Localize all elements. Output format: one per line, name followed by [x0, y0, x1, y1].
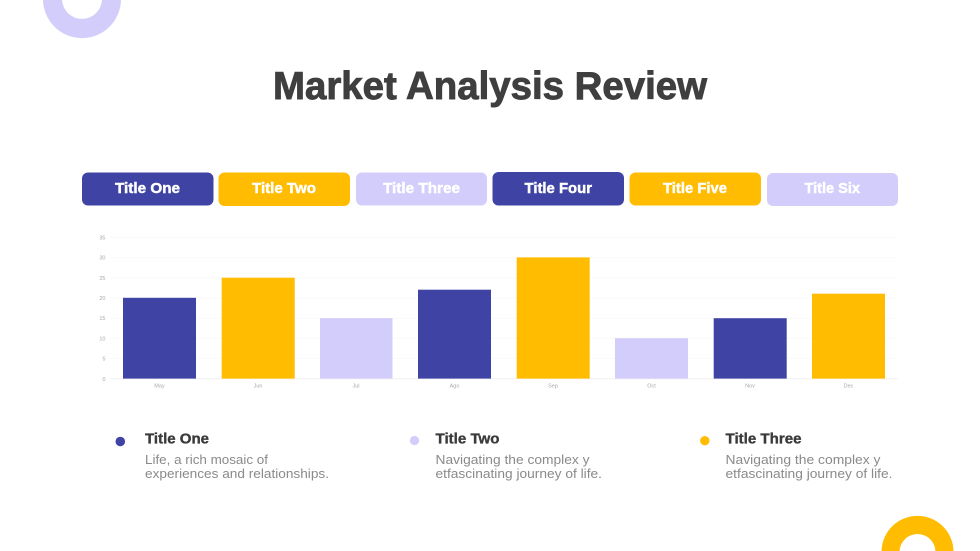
x axis labels: Nov	[745, 384, 755, 390]
tab: Title One: Title One	[115, 180, 180, 197]
y axis labels: 35	[99, 236, 106, 242]
x axis labels: Oct	[647, 384, 656, 390]
legend item: Title Two: Navigating the complex y	[436, 452, 590, 467]
x axis labels: May	[154, 384, 165, 390]
legend item: Title Three: etfascinating journey of life.	[726, 466, 892, 481]
decorative ring: top left	[43, 0, 121, 38]
bars	[123, 257, 885, 379]
y axis labels: 5	[102, 356, 106, 362]
tab: Title Six	[767, 173, 898, 206]
x axis labels: Jul	[352, 384, 360, 390]
tab: Title Two	[218, 172, 350, 206]
tab: Title One	[82, 172, 214, 206]
x axis labels: Sep	[548, 384, 558, 390]
y axis labels	[99, 236, 106, 383]
y axis labels: 10	[99, 336, 106, 342]
legend item: Title Three: Navigating the complex y	[726, 452, 881, 467]
category title tabs	[82, 172, 898, 206]
legend item: Title Two: etfascinating journey of life.	[436, 466, 602, 481]
y axis labels: 30	[99, 256, 106, 262]
legend item: Title Three: Title Three	[726, 431, 802, 447]
tab: Title Three: Title Three	[383, 180, 460, 197]
legend item: Title One: experiences and relationships.	[145, 466, 329, 481]
legend item: Title One: Life, a rich mosaic of	[145, 452, 268, 467]
legend item: Title One: Title One	[145, 431, 209, 447]
legend item: Title One	[116, 431, 329, 481]
x axis labels: Jun	[254, 384, 262, 390]
tab: Title Four	[492, 172, 624, 206]
tab: Title Four: Title Four	[524, 180, 592, 197]
x axis labels: Dec	[844, 384, 854, 390]
bar chart	[99, 236, 898, 390]
tab: Title Five: Title Five	[663, 180, 727, 197]
decorative ring: bottom right	[882, 516, 953, 551]
y axis labels: 25	[99, 276, 106, 282]
tab: Title Six: Title Six	[804, 180, 861, 197]
title: Market Analysis Review	[273, 65, 708, 108]
x axis labels	[154, 384, 854, 390]
y axis labels: 0	[102, 377, 106, 383]
legend item: Title Two	[410, 431, 602, 481]
x axis labels: Ago	[450, 384, 459, 390]
tab: Title Two: Title Two	[252, 180, 316, 197]
y axis labels: 15	[99, 316, 106, 322]
y axis labels: 20	[99, 296, 106, 302]
tab: Title Three	[356, 172, 487, 206]
tab: Title Five	[630, 172, 761, 206]
legend item: Title Three	[700, 431, 892, 481]
legend item: Title Two: Title Two	[436, 431, 500, 447]
